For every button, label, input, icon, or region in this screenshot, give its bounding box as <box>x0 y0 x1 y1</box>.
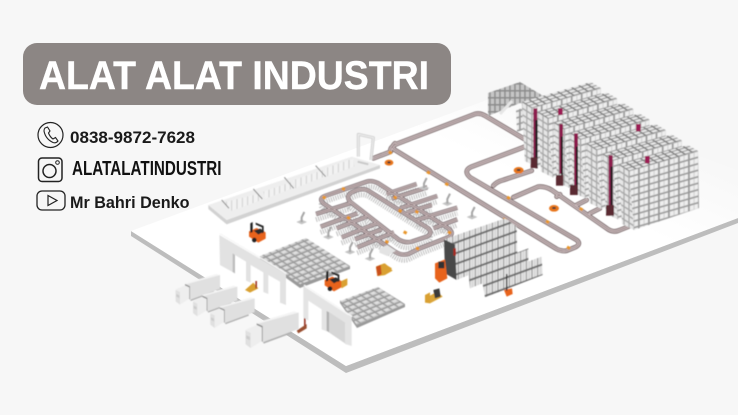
conveyor network <box>373 114 630 251</box>
gantry frame <box>358 134 373 164</box>
sorter conveyor <box>316 181 457 260</box>
pick racks <box>444 218 543 297</box>
title banner <box>23 43 451 105</box>
back rack with robot arm <box>488 82 545 132</box>
storage cranes <box>531 108 650 216</box>
loading platform with racks <box>208 157 380 224</box>
conveyor shuttles <box>323 152 583 249</box>
automated guided vehicles <box>385 160 559 212</box>
title banner: ALAT ALAT INDUSTRI <box>39 54 429 98</box>
loading dock walls <box>219 233 353 346</box>
pallet storage blocks <box>260 238 405 328</box>
contact: phone <box>38 122 195 148</box>
contact: instagram: ALATALATINDUSTRI <box>72 158 222 180</box>
delivery trucks <box>176 274 299 348</box>
robot arms <box>296 178 477 261</box>
warehouse floor <box>131 97 738 373</box>
automated storage racks <box>522 82 699 230</box>
contact: video channel: Mr Bahri Denko <box>70 193 190 212</box>
contact: instagram <box>38 158 222 182</box>
contact: video channel <box>37 191 190 212</box>
forklifts <box>245 222 430 333</box>
reach truck and pallet trucks <box>376 259 513 303</box>
contact: phone: 0838-9872-7628 <box>70 129 195 147</box>
warehouse illustration <box>176 82 699 348</box>
